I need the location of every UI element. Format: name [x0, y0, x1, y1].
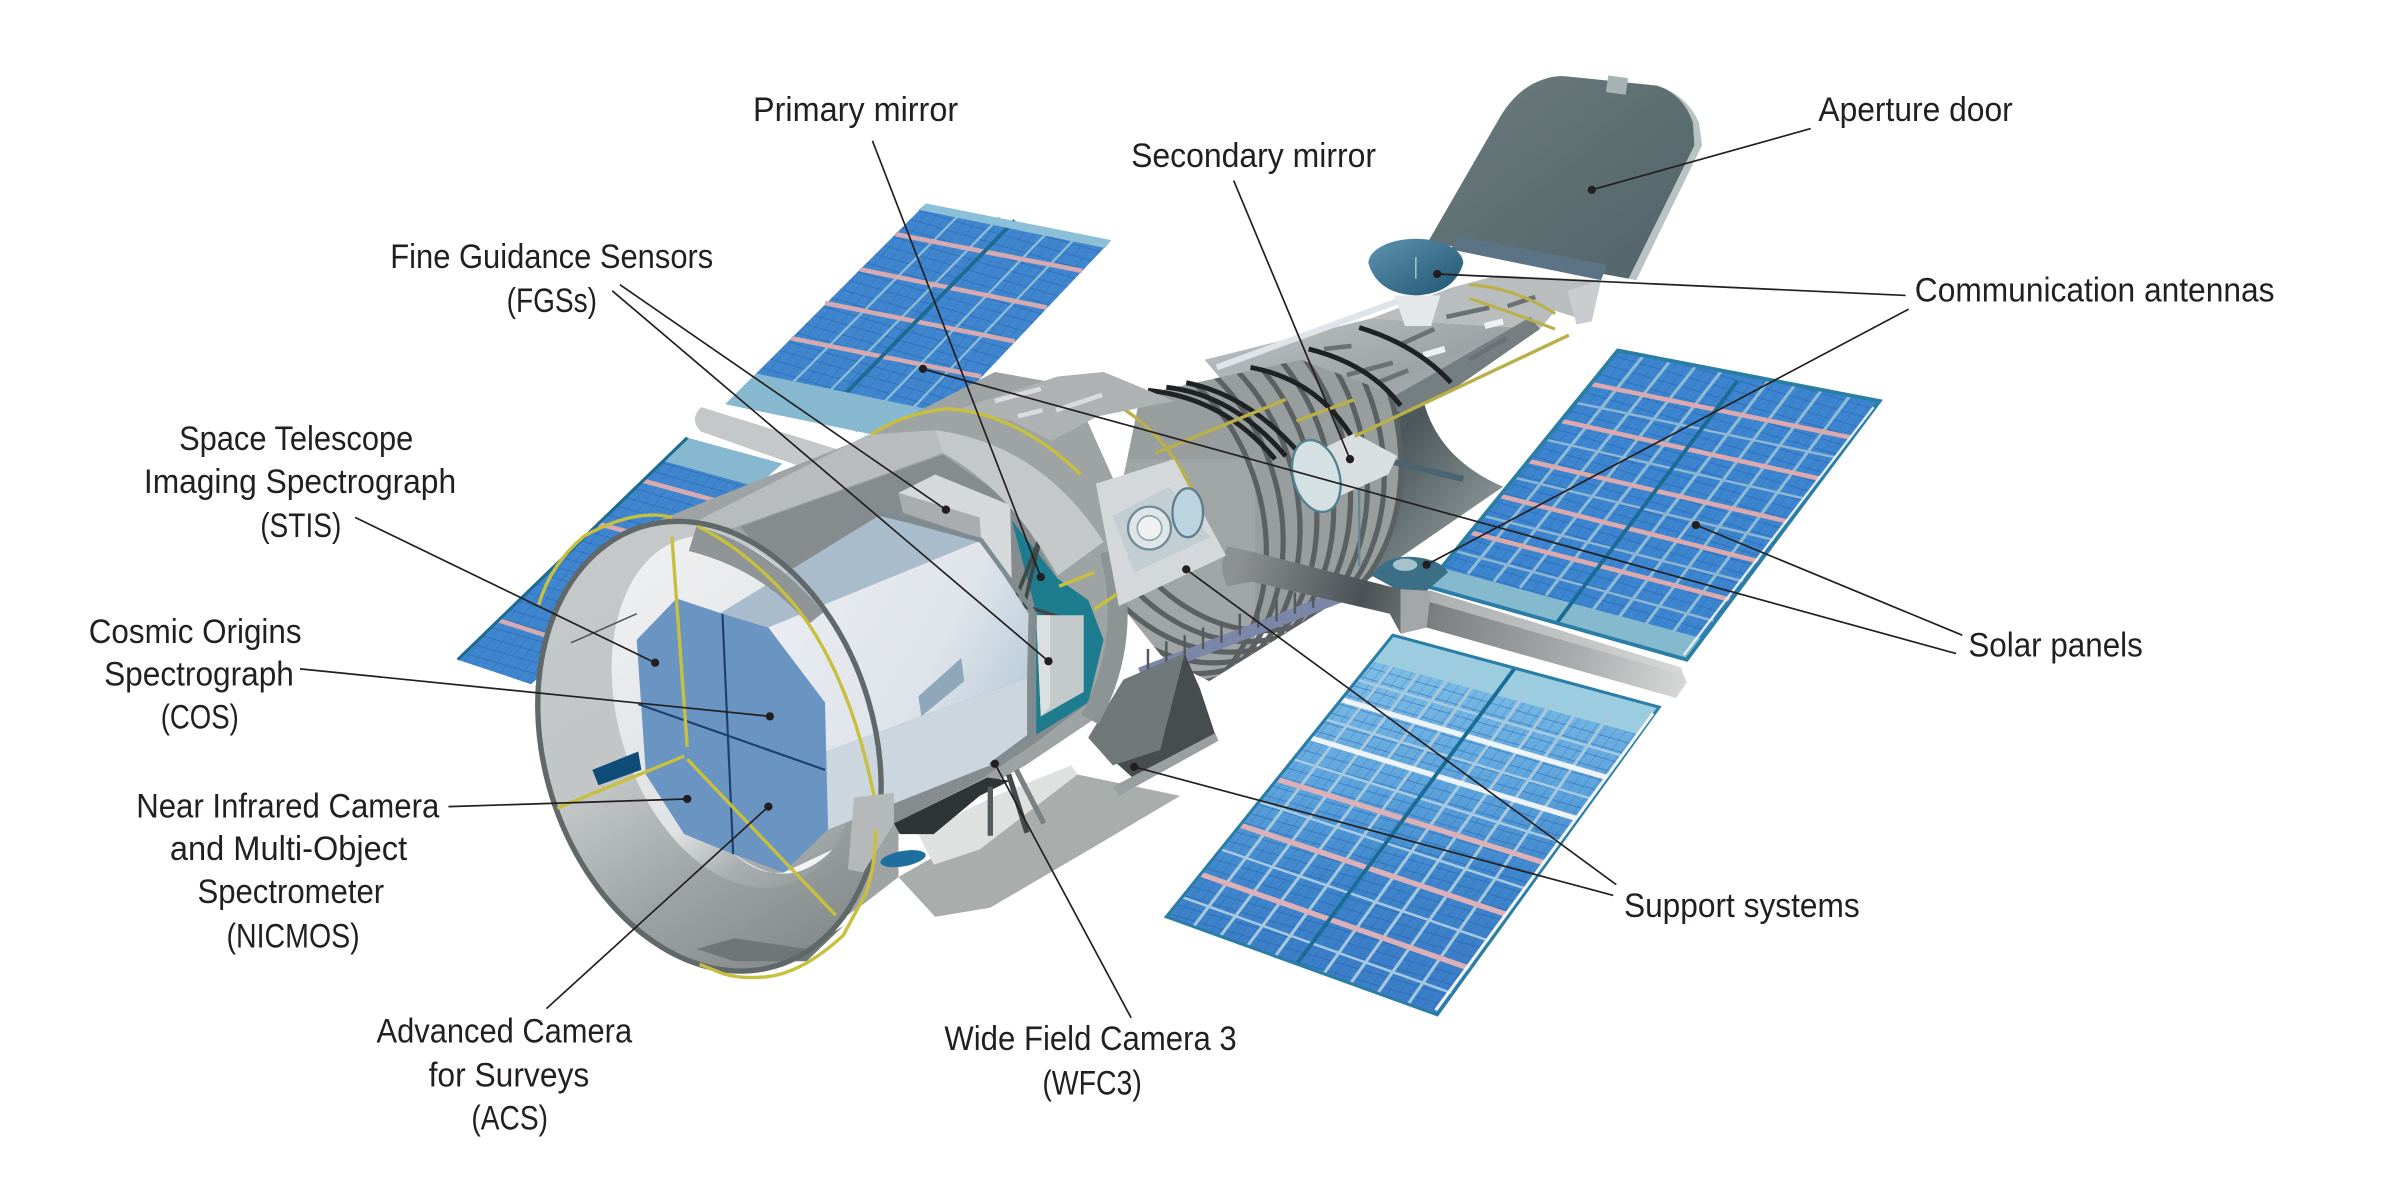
upper silver housing: [960, 372, 1174, 441]
spacecraft illustration: [458, 75, 1880, 1015]
secondary mirror assembly: [1284, 433, 1463, 566]
label: fine guidance sensors: [390, 238, 713, 320]
solar array drive boom: [1222, 546, 1687, 698]
label: space telescope imaging spectrograph: [144, 420, 456, 545]
label: cosmic origins spectrograph: [89, 613, 302, 737]
label: space telescope imaging spectrograph: Space Telescope: [179, 420, 413, 458]
solar panel: rear lower section: [458, 438, 782, 684]
instrument bay box: [719, 513, 1035, 834]
label: NICMOS: (NICMOS): [227, 917, 360, 955]
label: NICMOS: [136, 787, 440, 955]
instrument blue faces: [637, 598, 833, 874]
silver beam with mirror lenses: [1096, 459, 1226, 606]
small lower antenna dish: [1371, 557, 1448, 600]
label: NICMOS: Spectrometer: [197, 873, 384, 911]
label: solar panels: Solar panels: [1968, 627, 2143, 665]
label: space telescope imaging spectrograph: (STIS): [260, 507, 341, 545]
label: cosmic origins spectrograph: Cosmic Origins: [89, 613, 302, 651]
lower curved flap: [898, 765, 1180, 917]
leader end dots: [651, 186, 1700, 811]
aft shell backing: [643, 372, 1125, 966]
opening rim and inner wall: [485, 478, 934, 1014]
forward tube: [1205, 276, 1601, 448]
label: NICMOS: and Multi-Object: [170, 830, 408, 868]
upper right solar panel: [1427, 351, 1880, 660]
label: cosmic origins spectrograph: (COS): [161, 699, 239, 737]
label: NICMOS: Near Infrared Camera: [136, 787, 440, 825]
far shell crescent: [1270, 401, 1503, 605]
front rim and shell strip: [485, 430, 1118, 1014]
label: advanced camera for surveys: Advanced Camera: [377, 1012, 633, 1050]
window interior: [741, 455, 1088, 823]
label: communication antennas: Communication antennas: [1915, 272, 2274, 310]
yellow support rails on aft shroud: [539, 409, 1117, 978]
communication antenna dish: [1368, 239, 1463, 326]
label: advanced camera for surveys: (ACS): [471, 1100, 548, 1138]
wide field camera struts: [990, 770, 1044, 836]
aperture door: [1428, 75, 1702, 324]
label: advanced camera for surveys: [377, 1012, 633, 1138]
label: cosmic origins spectrograph: Spectrograph: [104, 656, 294, 694]
label: space telescope imaging spectrograph: Imaging Spectrograph: [144, 463, 456, 501]
equipment bay under the shell: [1088, 654, 1218, 796]
label: wide field camera 3: (WFC3): [1042, 1064, 1142, 1102]
label: fine guidance sensors: (FGSs): [507, 282, 597, 320]
leader lines: [300, 129, 1962, 1018]
left boom: [695, 407, 949, 514]
solar panel: rear upper section: [726, 204, 1111, 444]
yellow support rails on forward section: [1110, 335, 1569, 493]
label: wide field camera 3: [944, 1020, 1237, 1102]
label: wide field camera 3: Wide Field Camera 3: [944, 1020, 1237, 1058]
fine guidance sensor boxes: [898, 474, 1084, 716]
lower right solar panel: [1166, 635, 1659, 1015]
label: advanced camera for surveys: for Surveys: [429, 1057, 589, 1095]
primary mirror teal baffle: [1010, 520, 1104, 735]
label: secondary mirror: Secondary mirror: [1131, 137, 1376, 175]
label: aperture door: Aperture door: [1818, 91, 2013, 129]
label: primary mirror: Primary mirror: [753, 91, 958, 129]
baffled section: [1124, 325, 1453, 681]
label: support systems: Support systems: [1624, 887, 1860, 925]
label: fine guidance sensors: Fine Guidance Sensors: [390, 238, 713, 276]
